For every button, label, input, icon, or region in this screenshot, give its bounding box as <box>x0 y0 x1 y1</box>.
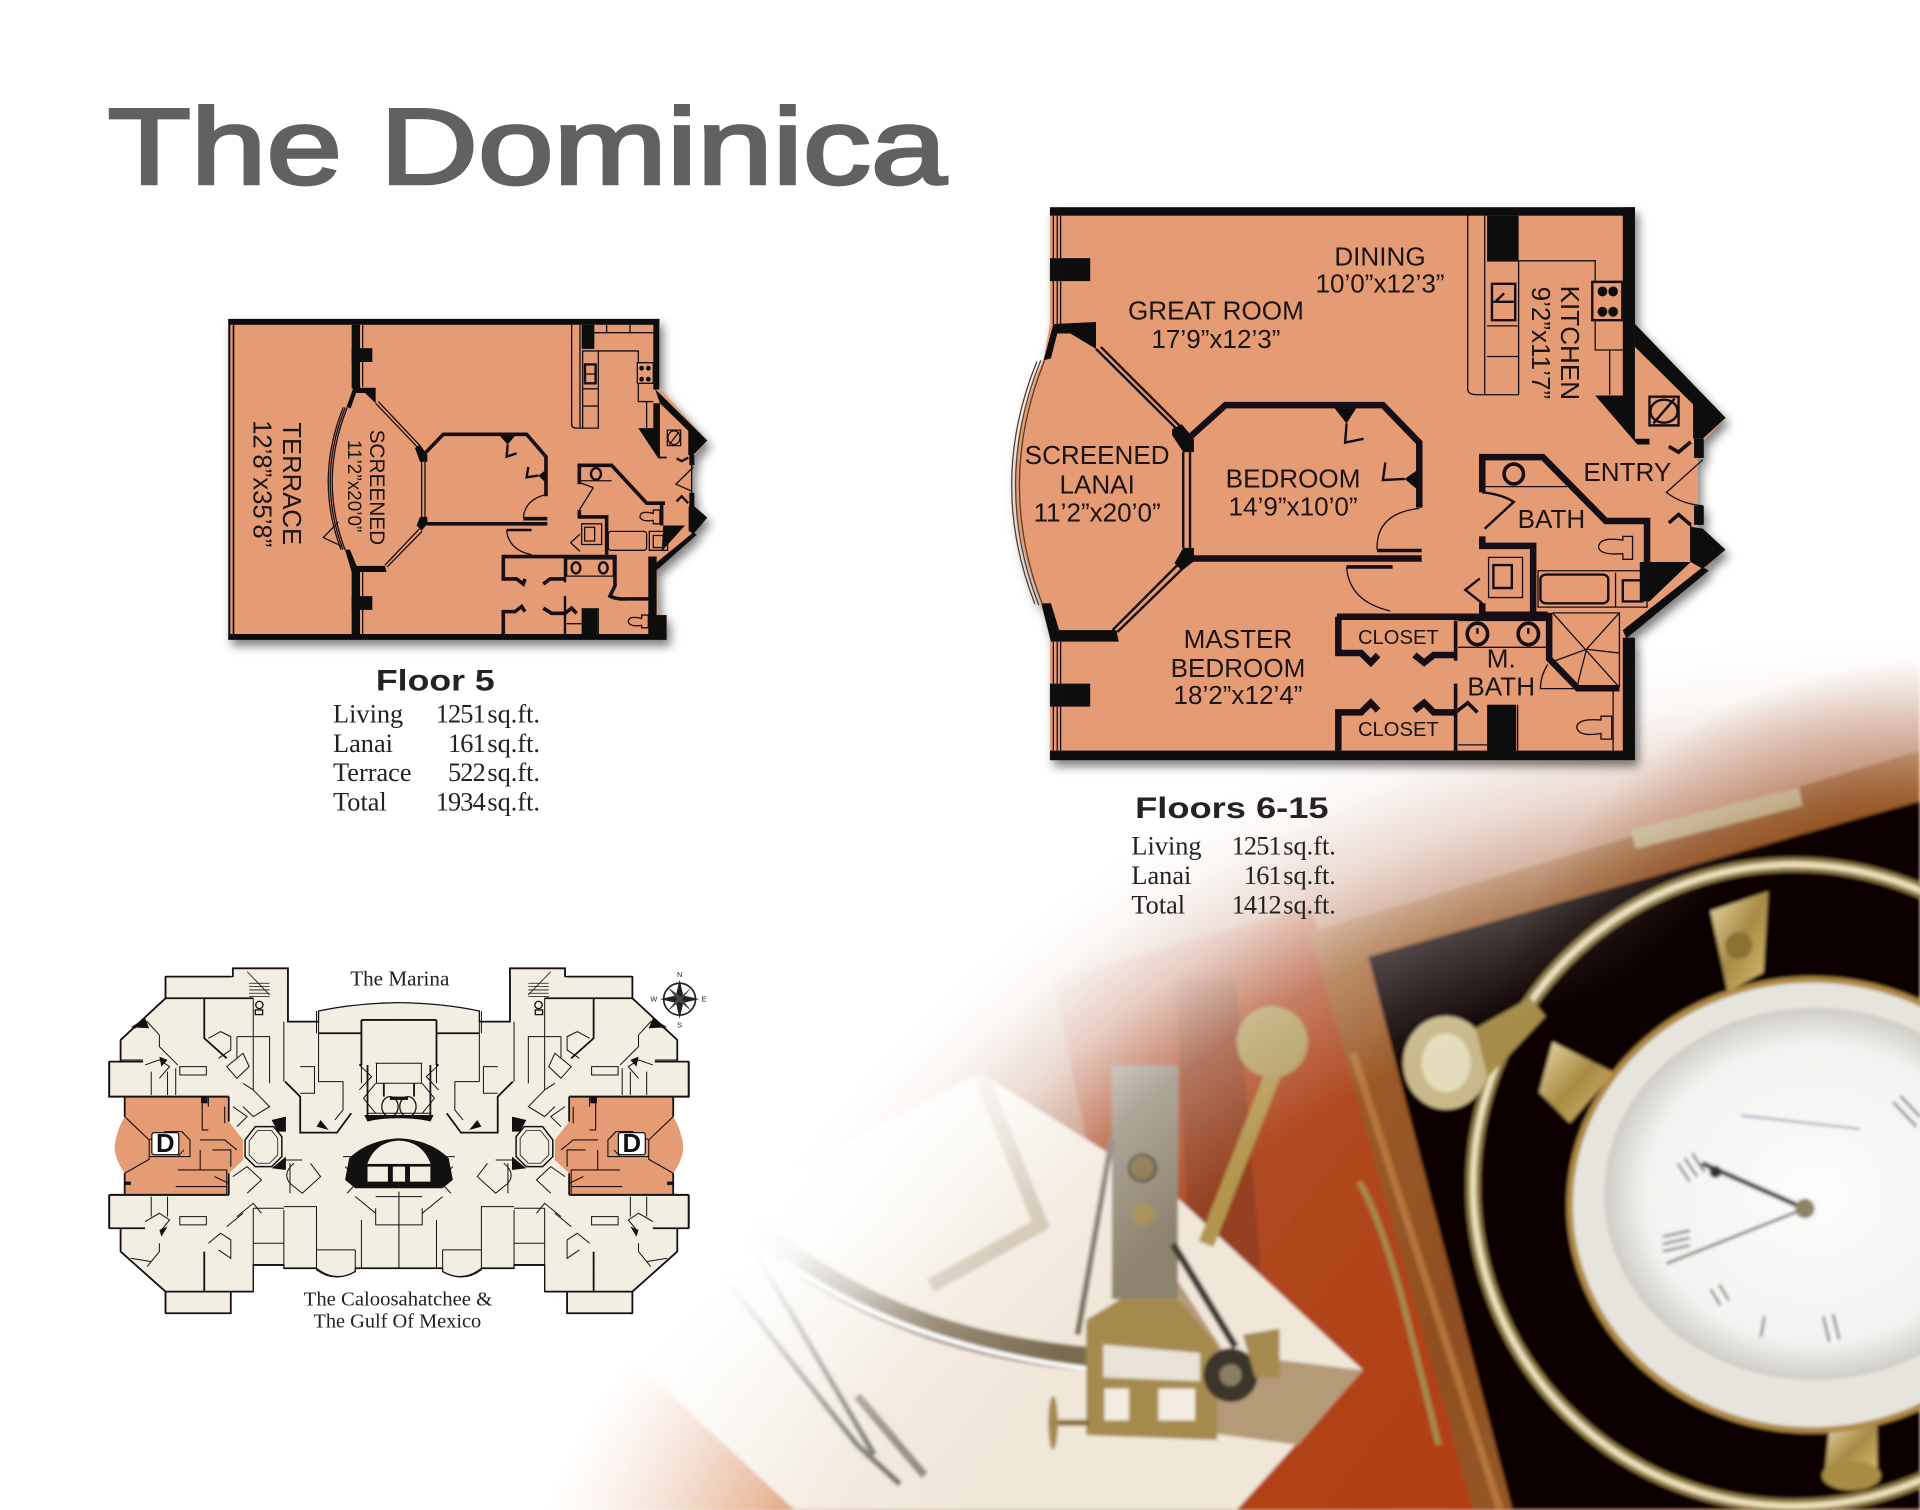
area table: floors 6-15: sq.ft. <box>1283 861 1336 890</box>
dial minute hand <box>1667 1209 1805 1264</box>
room labels: BEDROOM <box>1171 653 1305 683</box>
unit D interior <box>125 1097 237 1195</box>
box interior <box>1368 801 1920 1510</box>
canvas weave shadow <box>1173 1273 1363 1445</box>
room labels: ENTRY <box>1583 457 1671 487</box>
sextant brass block <box>1086 1299 1217 1440</box>
icon: compass rose: S <box>677 1020 682 1029</box>
sextant arc <box>787 1250 1089 1372</box>
mount bottom <box>1824 1425 1877 1476</box>
room labels: KITCHEN <box>1555 286 1585 400</box>
area table: floors 6-15: sq.ft. <box>1283 832 1336 861</box>
room labels: CLOSET <box>1358 719 1439 741</box>
table surface <box>641 666 1920 1510</box>
area table: floor 5: sq.ft. <box>487 699 540 728</box>
area table: floor 5: 522 <box>448 758 485 787</box>
dial case <box>1570 980 1920 1430</box>
background photo: sextant and chronometer fading into white <box>539 612 1920 1510</box>
marina label: The Marina <box>350 967 449 991</box>
sextant lever <box>1206 1073 1273 1244</box>
room labels: BATH <box>1518 504 1585 534</box>
screened lanai label: SCREENED <box>365 430 388 545</box>
gimbal mount top <box>1711 891 1768 992</box>
area table: floor 5: sq.ft. <box>487 758 540 787</box>
heading: floors 6-15: Floors 6-15 <box>1135 792 1329 825</box>
sextant screw <box>1051 1420 1090 1425</box>
floor plan: floors 6-15 <box>1012 207 1726 760</box>
dial centre <box>1795 1199 1815 1218</box>
area table: floor 5: sq.ft. <box>487 788 540 817</box>
area table: floors 6-15: Living <box>1131 832 1202 861</box>
brass tab <box>1539 1042 1614 1123</box>
canvas sheet <box>628 1073 1363 1510</box>
dial roman numeral marks <box>1663 1096 1920 1342</box>
room labels: 17’9”x12’3” <box>1151 324 1280 354</box>
river label: The Gulf Of Mexico <box>313 1310 481 1332</box>
area table: floor 5: Lanai <box>333 729 393 758</box>
sextant side bracket <box>1243 1329 1280 1378</box>
room labels: MASTER <box>1184 624 1292 654</box>
label D west: D <box>156 1130 175 1158</box>
dial hour hand <box>1702 1163 1805 1209</box>
room labels: BATH <box>1467 672 1535 702</box>
floor plan: floor 5 <box>228 319 707 640</box>
box side fitting <box>1359 1182 1439 1445</box>
sextant knob <box>1237 1007 1308 1078</box>
river label <box>304 1288 493 1332</box>
core walls <box>125 1018 399 1237</box>
red wood under instruments <box>1053 906 1518 1510</box>
room labels: SCREENED <box>1025 440 1170 470</box>
room labels: GREAT ROOM <box>1128 296 1304 326</box>
title: The Dominica <box>108 86 947 207</box>
area table: floors 6-15: 1251 <box>1232 832 1281 861</box>
heading: floor 5: Floor 5 <box>376 665 495 698</box>
sextant plate <box>1103 1344 1200 1381</box>
area table: floors 6-15: sq.ft. <box>1283 890 1336 919</box>
icon: compass rose <box>650 970 707 1029</box>
room labels: 11’2”x20’0” <box>1034 498 1161 528</box>
lower left table <box>662 1430 792 1510</box>
dividers shadow <box>857 1396 924 1476</box>
gimbal arm <box>1476 998 1545 1078</box>
screened lanai label <box>343 430 388 545</box>
room labels: LANAI <box>1059 469 1135 499</box>
area table: floors 6-15: Total <box>1131 890 1185 919</box>
sextant pillar <box>1112 1065 1178 1299</box>
room labels <box>1025 242 1671 741</box>
terrace label <box>247 420 305 547</box>
room labels: 18’2”x12’4” <box>1173 680 1302 710</box>
area table: floor 5: sq.ft. <box>487 729 540 758</box>
area table: floor 5: 161 <box>448 729 485 758</box>
outer gimbal ring <box>1473 864 1920 1506</box>
octagon lobby <box>245 1127 282 1167</box>
label D east: D <box>623 1130 641 1158</box>
area table: floor 5: Total <box>333 788 387 817</box>
box edge highlight <box>1353 1053 1500 1510</box>
area table: floors 6-15 <box>1131 832 1336 919</box>
icon: compass rose: E <box>702 995 707 1004</box>
room labels: M. <box>1487 643 1516 673</box>
area table: floor 5: 1934 <box>436 788 486 817</box>
label D east <box>618 1130 645 1158</box>
gimbal bolt <box>1725 932 1752 959</box>
canvas printed pattern <box>931 1073 1041 1286</box>
area table: floor 5 <box>333 699 540 817</box>
area table: floor 5: Living <box>333 699 403 728</box>
area table: floors 6-15: 1412 <box>1232 890 1281 919</box>
icon: compass rose: N <box>677 970 682 979</box>
table shadow strip <box>1176 980 1261 1273</box>
room labels: 10’0”x12’3” <box>1315 269 1445 299</box>
label D west <box>152 1130 179 1158</box>
sextant bolts <box>1129 1155 1156 1182</box>
sextant slots <box>1104 1389 1129 1420</box>
site plan <box>109 967 707 1332</box>
box frame <box>1310 751 1920 1510</box>
sextant arc scale <box>784 1261 1090 1369</box>
room labels: DINING <box>1334 242 1426 272</box>
terrace label: 12’8”x35’8” <box>247 420 275 547</box>
area table: floors 6-15: Lanai <box>1131 861 1191 890</box>
dial face <box>1604 1008 1920 1380</box>
room labels: BEDROOM <box>1226 463 1360 493</box>
terrace label: TERRACE <box>277 422 305 545</box>
sextant thin bars <box>1078 1139 1112 1335</box>
dividers <box>740 1275 903 1488</box>
screened lanai label: 11’2”x20’0” <box>343 440 364 532</box>
area table: floor 5: 1251 <box>436 699 485 728</box>
room labels: 14’9”x10’0” <box>1229 492 1358 522</box>
gimbal knob <box>1403 1016 1489 1109</box>
room labels: CLOSET <box>1358 627 1439 649</box>
area table: floor 5: Terrace <box>333 758 412 787</box>
icon: compass rose: W <box>650 995 657 1004</box>
room labels: 9’2”x11’7” <box>1526 287 1556 399</box>
dial blue hand <box>1741 1116 1860 1129</box>
box latch <box>1631 787 1802 849</box>
sextant roller <box>1204 1348 1258 1402</box>
river label: The Caloosahatchee & <box>304 1288 493 1310</box>
area table: floors 6-15: 161 <box>1244 861 1281 890</box>
